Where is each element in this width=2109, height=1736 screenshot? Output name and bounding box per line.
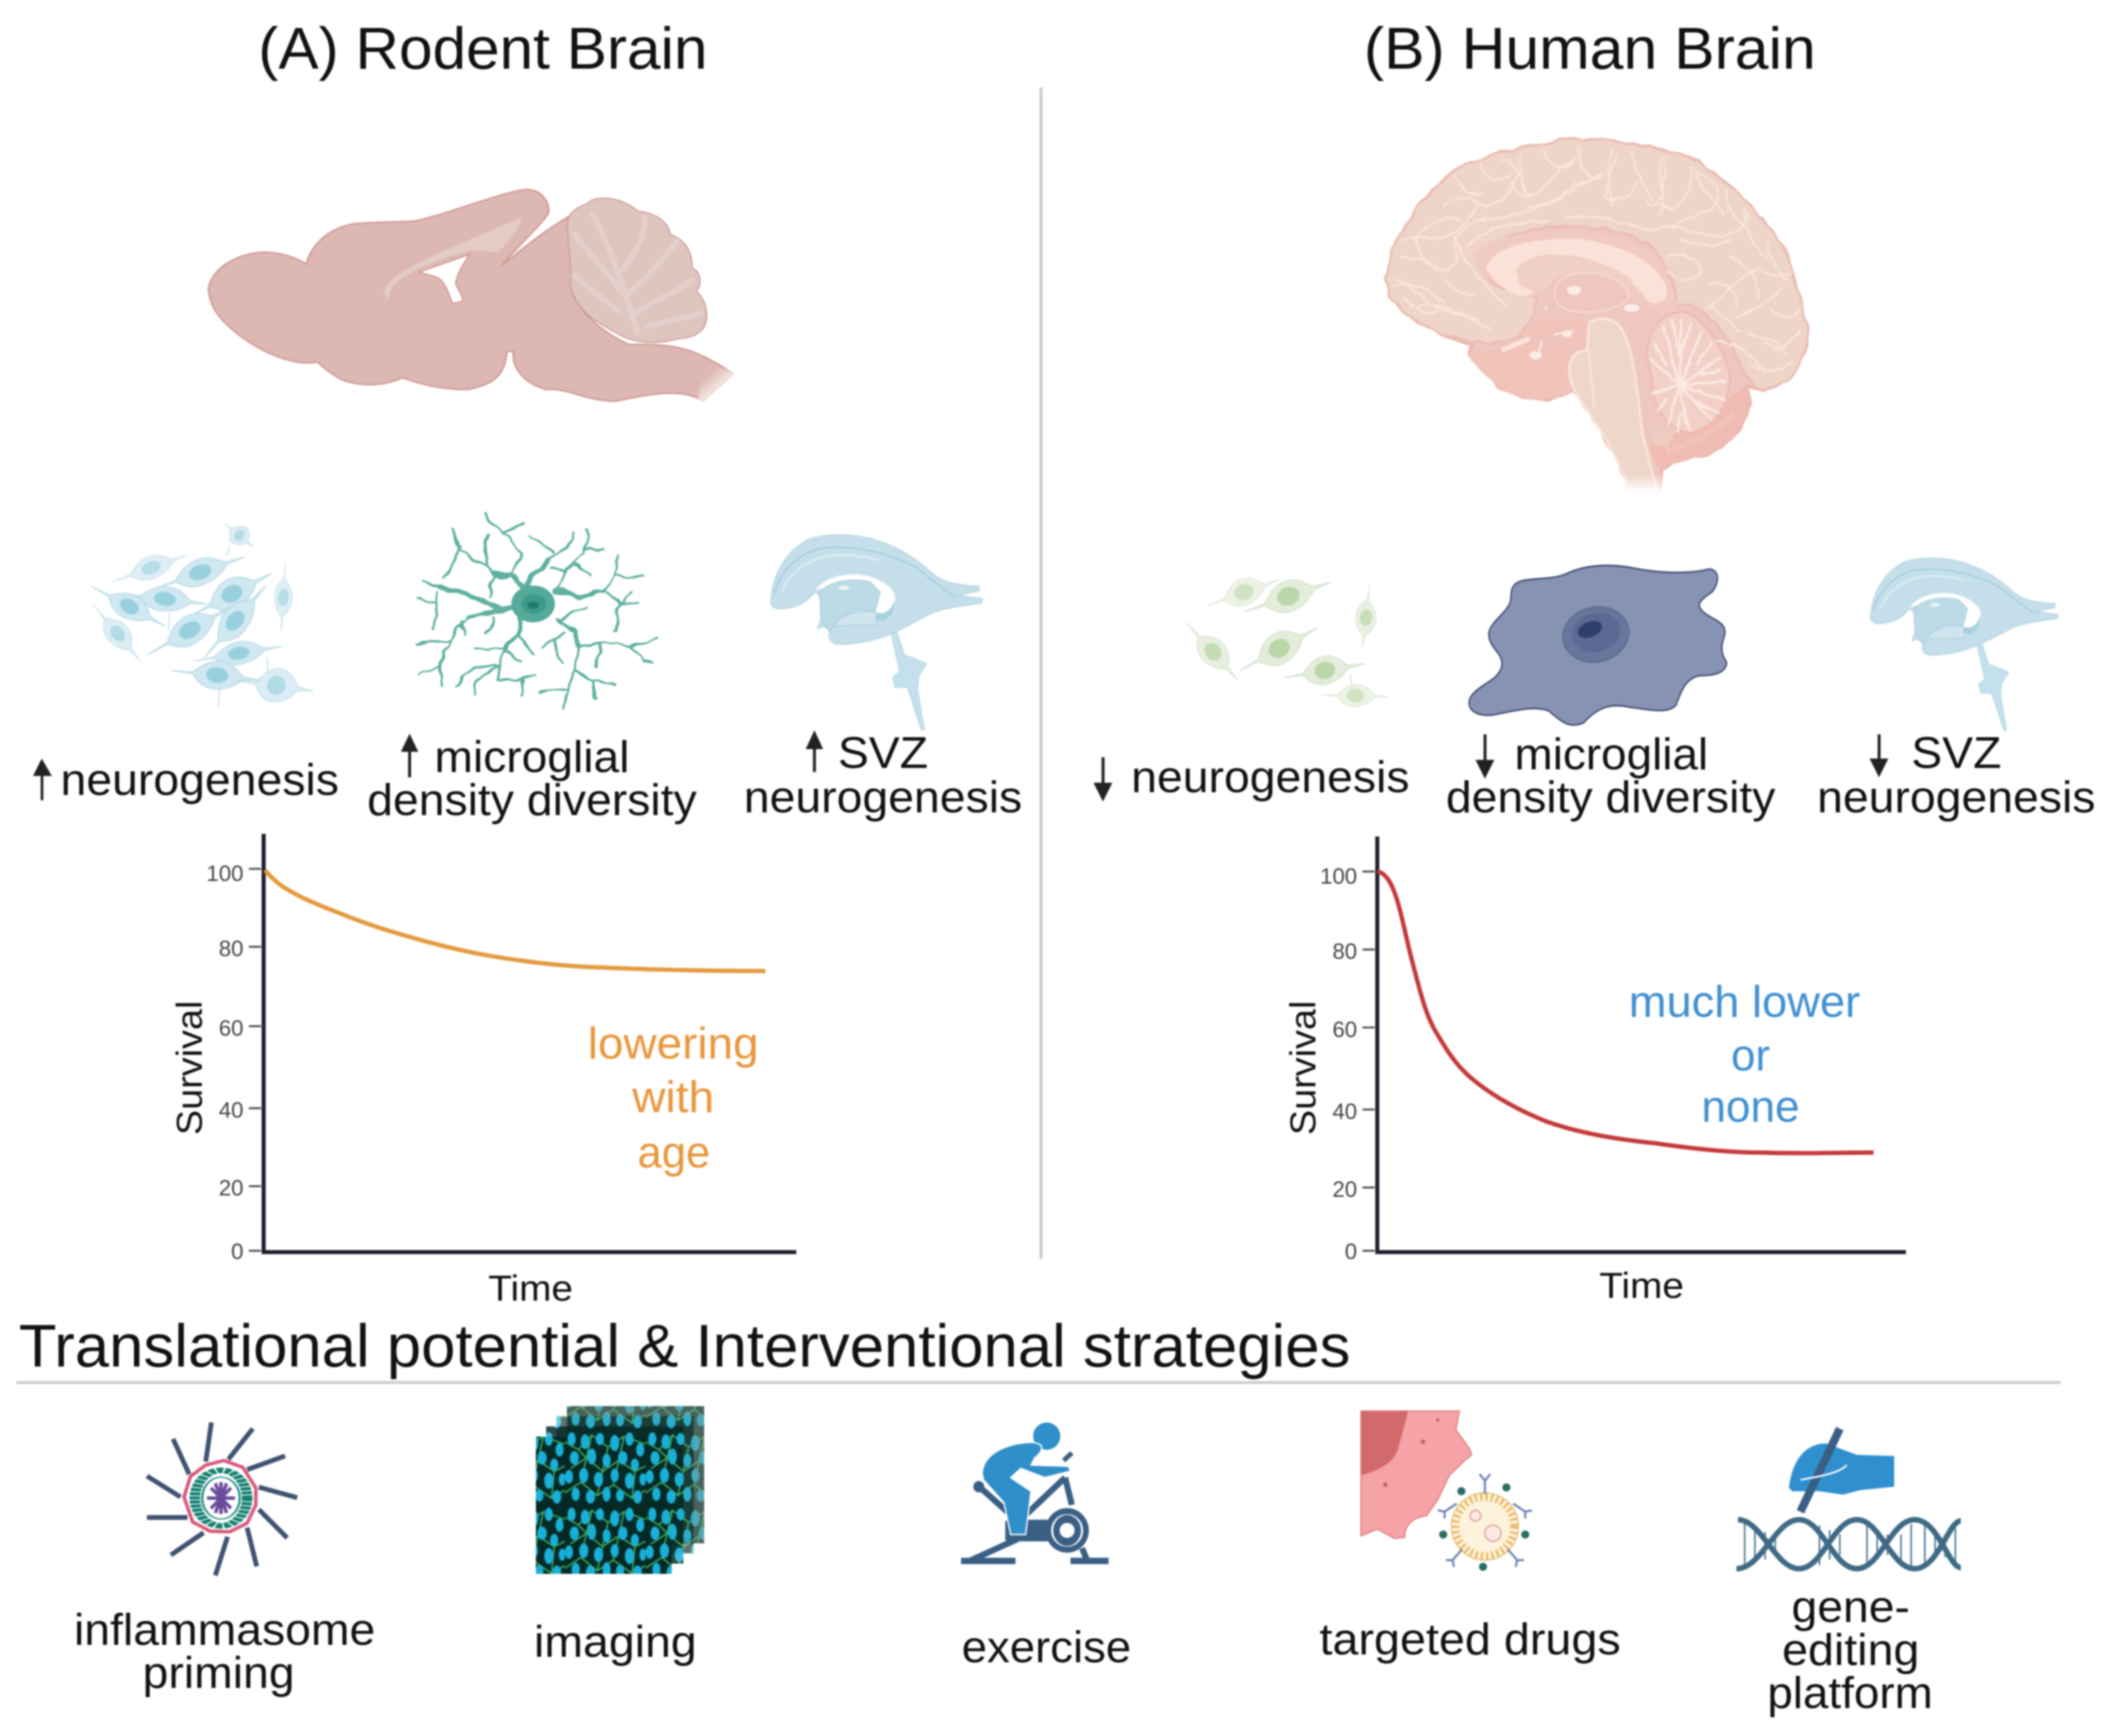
label: SVZ neurogenesis: [1817, 727, 2095, 822]
chart: human survival: 60: [1332, 1017, 1357, 1041]
icon: gene editing: [1737, 1429, 1961, 1569]
icon: neurogenesis cells (green): [1177, 568, 1389, 709]
label: imaging: imaging: [534, 1616, 697, 1666]
chart: rodent survival: [169, 834, 796, 1308]
chart: human survival: none: [1701, 1081, 1800, 1131]
panel: interventional strategies: [74, 1406, 1961, 1718]
label: microglial density diversity: density diversity: [367, 774, 697, 824]
chart: rodent survival: with: [632, 1072, 714, 1122]
label: gene-editing platform: platform: [1768, 1668, 1933, 1718]
icon: inflammasome: [147, 1423, 297, 1576]
label: inflammasome priming: priming: [143, 1647, 294, 1697]
label: gene-editing platform: gene-: [1791, 1582, 1910, 1632]
chart: human survival: Survival: [1283, 1000, 1324, 1135]
illustration: human brain: [1385, 139, 1808, 495]
label: SVZ neurogenesis: neurogenesis: [1817, 772, 2095, 822]
chart: human survival: 20: [1332, 1177, 1357, 1202]
chart: human survival: Time: [1600, 1265, 1684, 1306]
chart: human survival: 0: [1345, 1239, 1357, 1263]
icon: neurogenesis cells (blue): [86, 514, 317, 709]
chart: human survival: 80: [1332, 939, 1357, 964]
chart: human survival: [1283, 837, 1906, 1306]
chart: human survival: 40: [1332, 1099, 1357, 1123]
label: targeted drugs: targeted drugs: [1319, 1614, 1621, 1664]
chart: human survival: much lower: [1629, 977, 1860, 1026]
chart: rodent survival: Survival: [169, 1000, 210, 1135]
arrow: down SVZ: [1869, 734, 1888, 777]
panel: rodent brain: [33, 16, 1022, 1308]
panel: human brain: [1093, 16, 2095, 1306]
label: microglial density diversity: microglial: [1515, 729, 1708, 779]
heading: translational potential: Translational potential & Interventional strategies: [19, 1312, 1350, 1380]
icon: SVZ structure: [1871, 558, 2058, 731]
illustration: rodent brain: [208, 189, 755, 419]
label: neurogenesis: neurogenesis: [61, 755, 339, 804]
chart: rodent survival: age: [638, 1127, 710, 1177]
arrow: down neurogenesis: [1093, 757, 1113, 802]
chart: rodent survival: 60: [219, 1016, 243, 1040]
icon: SVZ structure: [770, 535, 983, 729]
icon: targeted drugs: [1361, 1411, 1532, 1571]
label: gene-editing platform: editing: [1782, 1625, 1919, 1675]
arrow: up neurogenesis: [33, 759, 52, 800]
chart: rodent survival: 40: [219, 1098, 243, 1123]
label: SVZ neurogenesis: SVZ: [838, 727, 928, 777]
icon: exercise bike: [961, 1423, 1108, 1564]
arrow: up SVZ: [806, 730, 823, 772]
title: rodent brain: (A) Rodent Brain: [258, 16, 708, 81]
label: SVZ neurogenesis: SVZ: [1911, 727, 2001, 777]
chart: rodent survival: 0: [231, 1239, 243, 1263]
chart: rodent survival: lowering: [588, 1018, 759, 1068]
chart: human survival: or: [1731, 1031, 1770, 1080]
label: SVZ neurogenesis: neurogenesis: [744, 772, 1022, 822]
title: human brain: (B) Human Brain: [1364, 16, 1816, 81]
arrow: up microglial: [401, 733, 419, 777]
label: microglial density diversity: [1446, 729, 1776, 822]
chart: rodent survival: 20: [219, 1176, 243, 1201]
arrow: down microglial: [1475, 734, 1494, 779]
label: microglial density diversity: [367, 731, 697, 824]
icon: microglia (branched): [418, 515, 660, 709]
chart: human survival: 100: [1320, 864, 1357, 888]
label: microglial density diversity: microglial: [434, 731, 630, 781]
label: SVZ neurogenesis: [744, 727, 1022, 822]
chart: rodent survival: Time: [488, 1268, 573, 1308]
icon: amoeboid microglia: [1469, 565, 1727, 725]
label: exercise: exercise: [962, 1622, 1131, 1672]
label: neurogenesis: neurogenesis: [1131, 752, 1410, 802]
section rule: [16, 1382, 2061, 1383]
icon: imaging stack: [536, 1406, 704, 1573]
label: inflammasome priming: [74, 1604, 375, 1697]
divider: [1040, 87, 1042, 1259]
chart: rodent survival: 100: [206, 861, 243, 886]
chart: rodent survival: 80: [219, 936, 243, 961]
label: microglial density diversity: density diversity: [1446, 772, 1776, 822]
label: gene-editing platform: [1768, 1582, 1933, 1718]
label: inflammasome priming: inflammasome: [74, 1604, 375, 1654]
